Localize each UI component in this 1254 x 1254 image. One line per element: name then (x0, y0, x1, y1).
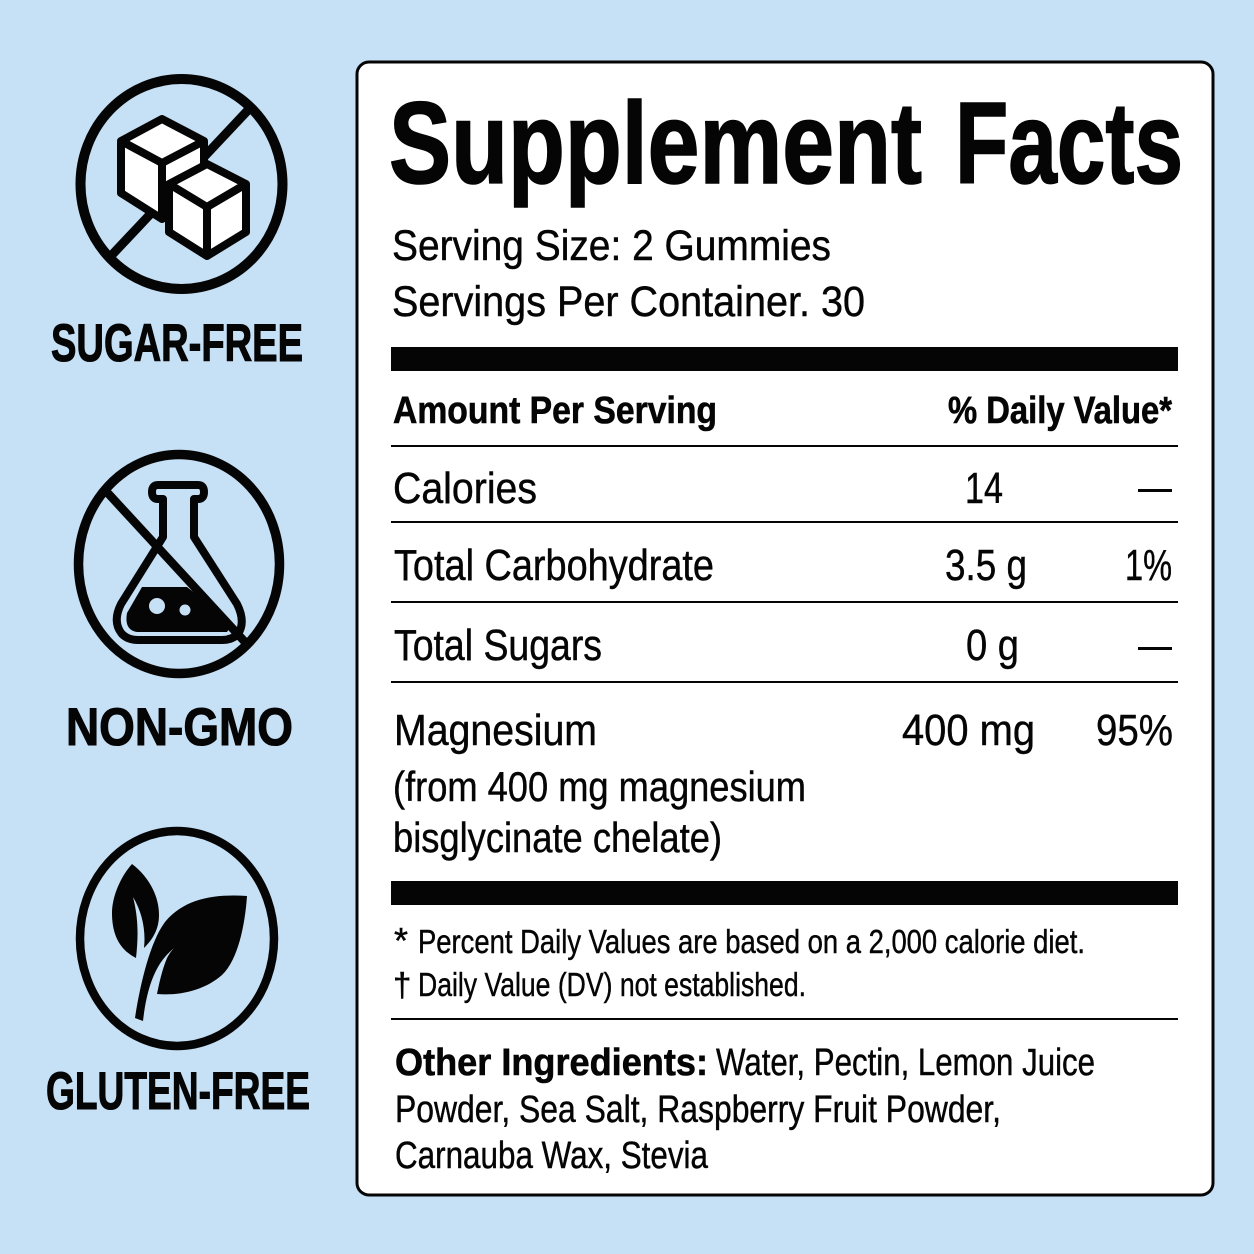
title: Supplement (389, 78, 922, 208)
row: calories: 14 (965, 464, 1003, 513)
other ingredients (395, 1042, 1095, 1177)
row: calories (393, 464, 1172, 513)
divider: top thick bar (391, 347, 1178, 371)
serving info (392, 222, 865, 326)
row: total sugars: 0 g (966, 621, 1019, 670)
row: total carbohydrate: Total Carbohydrate (394, 541, 714, 590)
table header: Amount Per Serving (393, 390, 717, 432)
label: sugar-free: SUGAR-FREE (51, 314, 303, 373)
footnotes: Daily Value (DV) not established. (418, 966, 806, 1003)
row: magnesium: Magnesium (394, 706, 597, 755)
serving info: Serving Size: 2 Gummies (392, 222, 831, 270)
table header: % Daily Value* (948, 390, 1172, 432)
footnotes (393, 920, 1085, 1003)
footnotes: † (393, 966, 411, 1003)
row: total sugars (394, 621, 1172, 670)
row: total sugars: Total Sugars (394, 621, 602, 670)
title: Facts (955, 78, 1183, 208)
row: magnesium: bisglycinate chelate) (393, 814, 722, 861)
row: total carbohydrate (394, 541, 1172, 590)
divider: lower thick bar (391, 881, 1178, 905)
icon: non-GMO (78, 454, 280, 674)
other ingredients: Water, Pectin, Lemon Juice (716, 1042, 1095, 1084)
other ingredients: Powder, Sea Salt, Raspberry Fruit Powder, (395, 1089, 1001, 1131)
row: magnesium: 95% (1096, 706, 1173, 755)
row: magnesium: (from 400 mg magnesium (393, 763, 806, 810)
other ingredients: Other Ingredients: (395, 1042, 708, 1084)
other ingredients: Carnauba Wax, Stevia (395, 1135, 709, 1177)
row: magnesium: 400 mg (902, 706, 1035, 755)
serving info: Servings Per Container. 30 (392, 278, 865, 326)
footnotes: * (394, 920, 408, 961)
row: calories: Calories (393, 464, 537, 513)
panel: supplement facts (357, 62, 1213, 1195)
label: non-GMO: NON-GMO (66, 698, 293, 757)
icon: gluten-free (80, 831, 274, 1046)
table header (393, 390, 1172, 432)
footnotes: Percent Daily Values are based on a 2,000 calorie diet. (418, 923, 1085, 960)
row: magnesium (393, 706, 1173, 861)
row: total carbohydrate: 1% (1125, 541, 1172, 590)
row: total carbohydrate: 3.5 g (945, 541, 1027, 590)
label: gluten-free: GLUTEN-FREE (46, 1062, 310, 1121)
icon: sugar-free (80, 79, 282, 289)
